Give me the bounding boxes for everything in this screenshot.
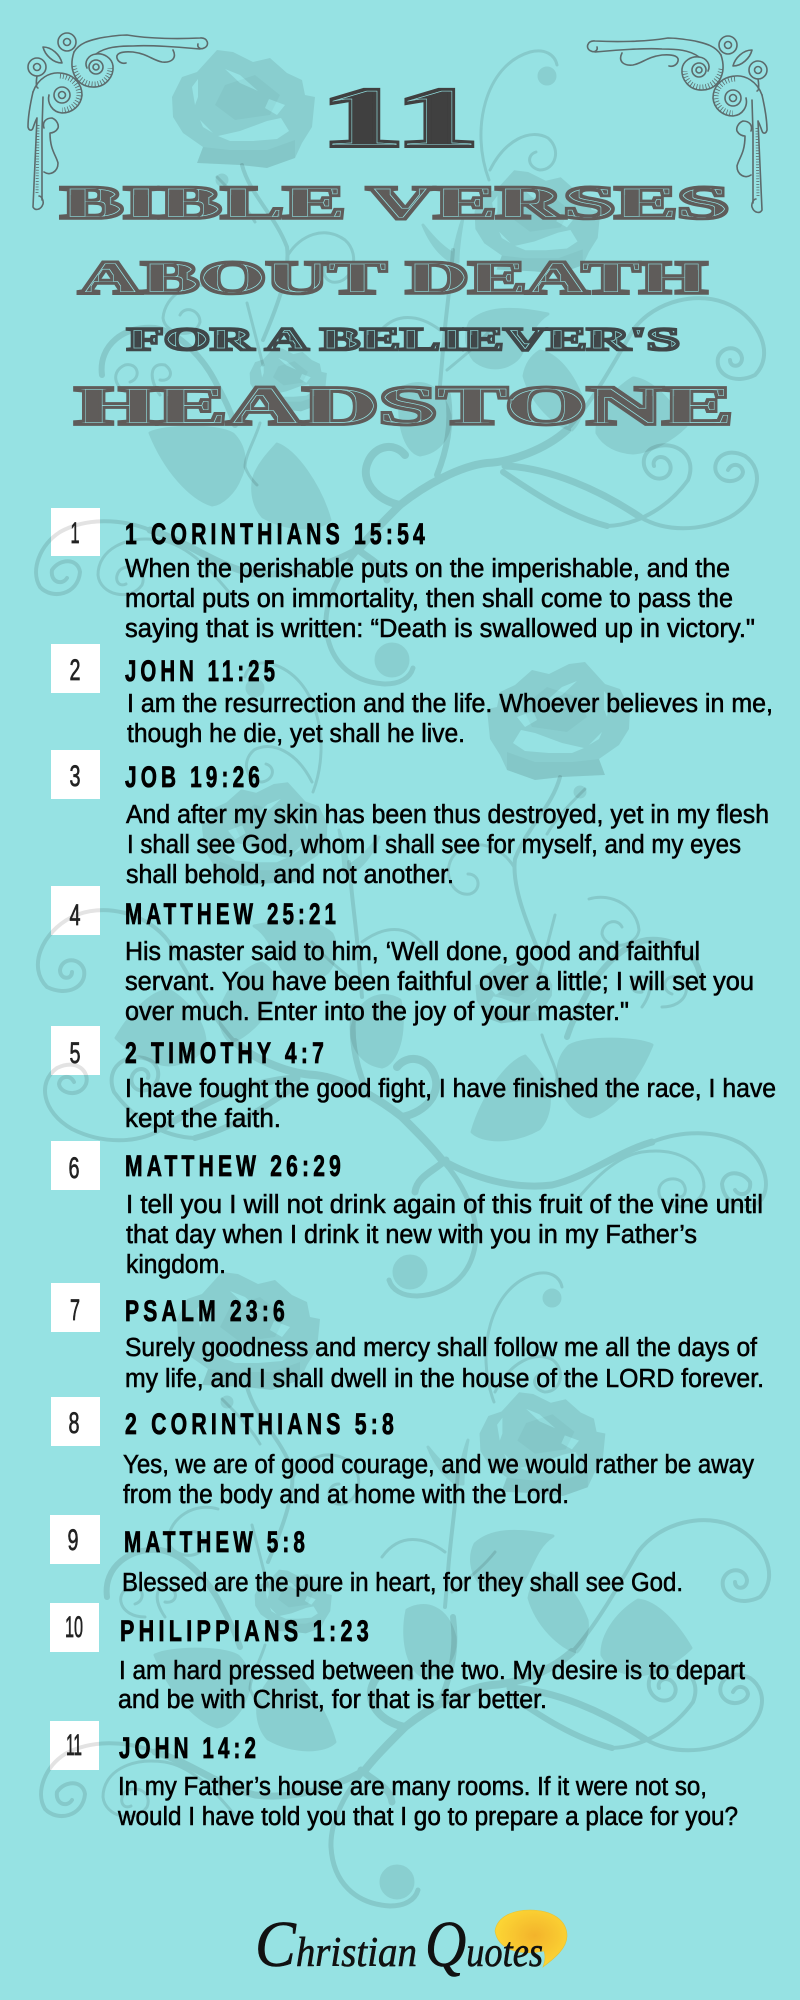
vine tile: bottom <box>41 1272 769 1906</box>
logo text <box>255 1908 543 1981</box>
stems and swirls <box>36 51 764 684</box>
verse 4 <box>70 898 754 1026</box>
verse 4: over much. Enter into the joy of your master." <box>125 998 629 1026</box>
swirl two <box>33 73 82 113</box>
vine tile: middle, mirrored <box>38 662 766 1296</box>
vertical bar <box>28 92 43 209</box>
verse 11: 11 <box>66 1729 82 1762</box>
verse 3: JOB 19:26 <box>125 761 264 794</box>
verse 10: I am hard pressed between the two. My desire is to depart <box>119 1657 745 1685</box>
verse 3 <box>70 760 769 889</box>
leaves <box>150 68 686 676</box>
verse 7 <box>70 1294 764 1393</box>
verse 9 <box>68 1524 683 1597</box>
verse 2: though he die, yet shall he live. <box>127 720 465 748</box>
number boxes <box>50 508 100 1770</box>
verse 8: 8 <box>68 1407 80 1440</box>
verse 2: JOHN 11:25 <box>125 655 279 688</box>
verse 5: I have fought the good fight, I have finished the race, I have <box>125 1075 776 1103</box>
verse 10: 10 <box>65 1611 83 1644</box>
verse 3: 3 <box>70 760 80 793</box>
verse 5: 5 <box>70 1037 80 1070</box>
verse 8: 2 CORINTHIANS 5:8 <box>125 1408 398 1441</box>
verse 9: MATTHEW 5:8 <box>124 1526 309 1559</box>
title: 11: 11 <box>320 71 479 165</box>
large rose <box>172 50 315 168</box>
verse 7: PSALM 23:6 <box>125 1295 289 1328</box>
verse 3: shall behold, and not another. <box>126 861 454 889</box>
upper right rose <box>475 170 600 274</box>
verse 1: saying that is written: “Death is swallowed up in victory." <box>125 615 755 643</box>
verse 2: 2 <box>70 654 80 687</box>
verse 2 <box>70 654 773 748</box>
swirl one <box>72 52 113 87</box>
title: headstone: HEADSTONE <box>75 375 733 436</box>
verse 11: would I have told you that I go to prepare a place for you? <box>117 1803 738 1831</box>
verse 8 <box>68 1407 754 1509</box>
verse 6 <box>68 1150 763 1279</box>
verse 3: And after my skin has been thus destroyed, yet in my flesh <box>126 801 769 829</box>
title: bible verses: BIBLE VERSES <box>61 177 729 229</box>
verse 1: When the perishable puts on the imperishable, and the <box>125 555 730 583</box>
verse 1: mortal puts on immortality, then shall come to pass the <box>125 585 733 613</box>
verse 1: 1 CORINTHIANS 15:54 <box>125 518 429 551</box>
title: about death: ABOUT DEATH <box>79 252 707 304</box>
vine tile: top <box>36 50 764 684</box>
verse 9: Blessed are the pure in heart, for they shall see God. <box>122 1569 683 1597</box>
verse 7: Surely goodness and mercy shall follow me all the days of <box>125 1334 758 1362</box>
verse 10 <box>65 1611 745 1714</box>
verse 7: 7 <box>70 1294 80 1327</box>
verse 10: PHILIPPIANS 1:23 <box>120 1615 373 1648</box>
verse 4: 4 <box>70 899 80 932</box>
title <box>61 71 733 436</box>
verse 11: JOHN 14:2 <box>119 1732 260 1765</box>
small center rose <box>250 348 327 411</box>
icon: speech bubble <box>495 1910 567 1967</box>
verse 1: 1 <box>70 517 80 550</box>
verse 5 <box>70 1037 776 1133</box>
title: for a believer's: FOR A BELIEVER'S <box>127 322 680 358</box>
verse 1 <box>70 517 755 643</box>
verse 4: servant. You have been faithful over a little; I will set you <box>125 968 754 996</box>
verse 6: that day when I drink it new with you in my Father’s <box>126 1221 697 1249</box>
verse 5: kept the faith. <box>125 1105 281 1133</box>
verse 6: I tell you I will not drink again of this fruit of the vine until <box>126 1191 763 1219</box>
verse 4: His master said to him, ‘Well done, good and faithful <box>125 938 700 966</box>
verse 6: 6 <box>68 1152 80 1185</box>
small spirals and leaf <box>28 58 46 76</box>
verse 4: MATTHEW 25:21 <box>125 898 340 931</box>
verse 2: I am the resurrection and the life. Whoever believes in me, <box>127 690 773 718</box>
corner ornament: top left <box>28 33 207 209</box>
verse 11 <box>66 1729 738 1831</box>
logo: Christian Quotes <box>255 1908 567 1981</box>
verse 8: Yes, we are of good courage, and we would rather be away <box>123 1451 754 1479</box>
verse 3: I shall see God, whom I shall see for myself, and my eyes <box>127 831 741 859</box>
verse 7: my life, and I shall dwell in the house of the LORD forever. <box>125 1365 764 1393</box>
verse 6: kingdom. <box>126 1251 226 1279</box>
verse 11: In my Father’s house are many rooms. If it were not so, <box>118 1773 707 1801</box>
corner ornament: top right <box>588 36 767 212</box>
verse 5: 2 TIMOTHY 4:7 <box>125 1037 328 1070</box>
logo text: Quotes <box>425 1908 543 1981</box>
logo text: Christian <box>255 1908 417 1981</box>
verse 10: and be with Christ, for that is far better. <box>118 1686 547 1714</box>
top bar <box>74 35 207 52</box>
verse 8: from the body and at home with the Lord. <box>123 1481 569 1509</box>
verse 6: MATTHEW 26:29 <box>125 1150 345 1183</box>
verse 9: 9 <box>68 1524 78 1557</box>
